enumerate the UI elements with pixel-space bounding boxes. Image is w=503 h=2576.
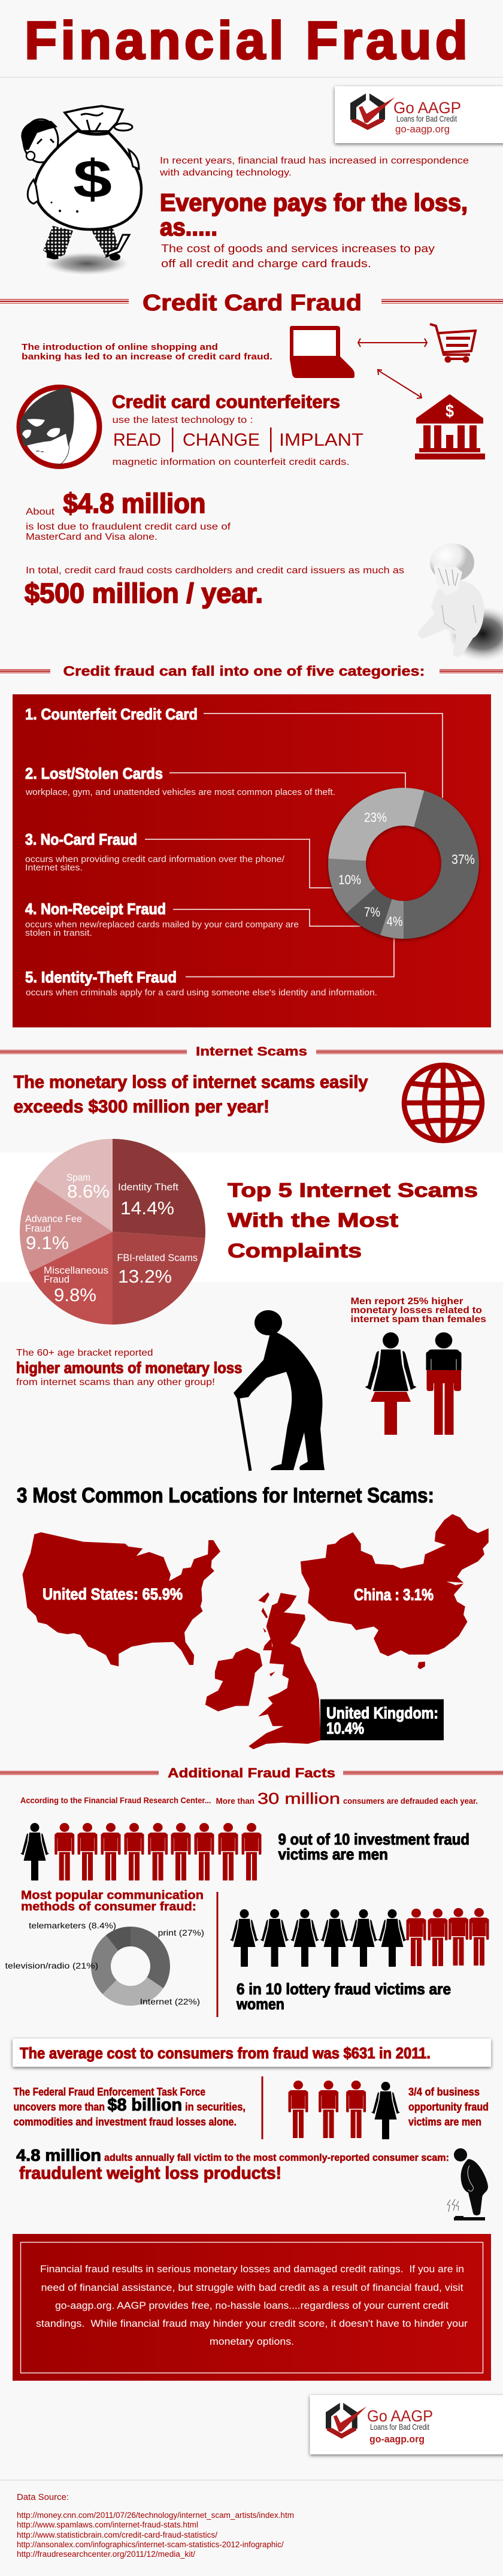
- chart: internet scam pie: Fraud: [44, 1274, 69, 1285]
- text: weight loss scam: 4.8 million: [16, 2146, 101, 2164]
- headline: 300 million: [13, 1072, 368, 1117]
- icon: figure on scale: [447, 2148, 488, 2220]
- stat: 500 million: $500 million / year.: [25, 578, 263, 609]
- map: united states: United States: 65.9%: [43, 1585, 183, 1603]
- intro text 2: off all credit and charge card frauds.: [161, 258, 371, 270]
- text: online shopping: banking has led to an increase of credit card fraud.: [22, 352, 272, 362]
- data sources: http://money.cnn.com/2011/07/26/technology/internet_scam_artists/index.htm: [17, 2511, 294, 2520]
- heading: credit card fraud: Credit Card Fraud: [143, 291, 362, 316]
- panel: conclusion: standings. While financial fraud may hinder your credit score, it doesn't have to hinder your: [36, 2318, 468, 2329]
- text: men report: internet spam than females: [351, 1314, 486, 1325]
- text: online shopping: [22, 343, 272, 362]
- title: Financial Fraud: [25, 10, 468, 70]
- panel: conclusion: go-aagp.org. AAGP provides free, no-hassle loans....regardless of your current credit: [55, 2300, 449, 2311]
- text: 30 million consumers: More than: [216, 1797, 254, 1806]
- data sources: [17, 2492, 294, 2559]
- category 5: 5. Identity-Theft Fraud: [25, 968, 177, 986]
- text: weight loss scam: fraudulent weight loss products!: [19, 2164, 281, 2183]
- logo card top: [335, 86, 503, 143]
- category 3: 3. No-Card Fraud: [25, 830, 137, 848]
- chart: communication methods donut: Internet (22%): [140, 1997, 200, 2006]
- chart: communication methods donut: telemarketers (8.4%): [29, 1921, 116, 1930]
- logo wordmark: Go AAGP: [393, 99, 461, 117]
- text: weight loss scam: adults annually fall victim to the most commonly-reported consumer scam:: [104, 2152, 449, 2163]
- data sources: Data Source:: [17, 2492, 69, 2502]
- heading: communication methods: [21, 1889, 204, 1913]
- text: 30 million consumers: 30 million: [257, 1789, 340, 1807]
- text: lottery victims: women: [236, 1995, 284, 2013]
- intro text: with advancing technology.: [159, 168, 292, 178]
- text: 30 million consumers: [20, 1789, 478, 1807]
- text: 30 million consumers: According to the Financial Fraud Research Center...: [20, 1796, 211, 1805]
- stat: 4.8 million: $4.8 million: [63, 488, 206, 519]
- text: 60+ age bracket: higher amounts of monetary loss: [16, 1359, 242, 1377]
- arrow: laptop to cart: [358, 338, 427, 347]
- panel: conclusion: monetary options.: [210, 2336, 294, 2347]
- text: task force: The Federal Fraud Enforcement Task Force: [13, 2086, 205, 2098]
- data sources: http://ansonalex.com/infographics/internet-scam-statistics-2012-infographic/: [17, 2540, 284, 2549]
- heading: internet scams: Internet Scams: [196, 1045, 307, 1059]
- heading: top 5 internet scams: [228, 1179, 478, 1262]
- headline: everyone pays: Everyone pays for the loss,: [160, 189, 468, 216]
- chart: internet scam pie: Advance Fee: [25, 1213, 82, 1224]
- text: lottery victims: [236, 1980, 451, 2013]
- text: business opportunity victims: victims are men: [408, 2116, 481, 2128]
- text: 60+ age bracket: [16, 1348, 242, 1387]
- chart: internet scam pie: 14.4%: [120, 1198, 174, 1219]
- heading: additional fraud facts: Additional Fraud Facts: [168, 1765, 335, 1780]
- chart: fraud category donut: 23%: [364, 810, 387, 825]
- category 5: [25, 968, 377, 998]
- chart: internet scam pie: Identity Theft: [118, 1181, 178, 1193]
- icon row: 3 of 4 business victims men: [289, 2081, 399, 2139]
- text: task force: $8 billion: [108, 2096, 182, 2115]
- category 1: 1. Counterfeit Credit Card: [25, 705, 198, 723]
- category 3: Internet sites.: [25, 863, 83, 873]
- category 4: stolen in transit.: [25, 929, 92, 938]
- headline: everyone pays: as.....: [160, 213, 217, 241]
- headline: everyone pays: [160, 189, 468, 241]
- illustration: stressed figure: [418, 543, 503, 661]
- category 4: occurs when new/replaced cards mailed by your card company are: [25, 920, 299, 930]
- chart: internet scam pie: Spam: [66, 1172, 90, 1183]
- category 4: 4. Non-Receipt Fraud: [25, 900, 166, 918]
- logo url: go-aagp.org: [395, 123, 450, 135]
- icon row: 9 of 10 investment victims men: [21, 1823, 261, 1880]
- text: men report: Men report 25% higher: [351, 1296, 463, 1307]
- map: united kingdom: 10.4%: [326, 1719, 364, 1737]
- logo tagline: Loans for Bad Credit: [396, 114, 457, 123]
- chart: fraud category donut: 4%: [387, 914, 402, 929]
- text: task force: uncovers more than: [13, 2101, 105, 2113]
- text: business opportunity victims: opportunity fraud: [408, 2101, 489, 2113]
- stat: 500 million: In total, credit card fraud costs cardholders and credit card issuers as much as: [26, 566, 404, 576]
- text: investment fraud victims: 9 out of 10 investment fraud: [278, 1830, 469, 1848]
- text: task force: in securities,: [185, 2101, 246, 2113]
- stat: 4.8 million: [26, 488, 231, 542]
- category 3: occurs when providing credit card information over the phone/: [25, 855, 285, 864]
- heading: top 5 internet scams: Top 5 Internet Scams: [228, 1179, 478, 1201]
- text: business opportunity victims: [408, 2086, 489, 2128]
- stat: 4.8 million: is lost due to fraudulent credit card use of: [26, 522, 231, 532]
- heading: top 5 internet scams: With the Most: [228, 1209, 398, 1231]
- heading: communication methods: methods of consumer fraud:: [21, 1900, 196, 1913]
- stat: 500 million: [25, 566, 404, 609]
- category 4: [25, 900, 299, 938]
- chart: internet scam pie: Fraud: [25, 1223, 51, 1234]
- text: task force: [13, 2086, 246, 2128]
- chart: internet scam pie: 9.8%: [54, 1284, 96, 1305]
- panel: conclusion: need of financial assistance, but struggle with bad credit as a result of financial fraud, visit: [41, 2282, 463, 2293]
- chart: communication methods donut: television/radio (21%): [5, 1961, 98, 1970]
- map: united kingdom: [205, 1592, 444, 1749]
- chart: fraud category donut: 7%: [364, 905, 380, 920]
- text: counterfeiters: CHANGE: [183, 430, 260, 450]
- text: investment fraud victims: victims are men: [278, 1845, 388, 1863]
- icon: bank: $: [446, 401, 454, 421]
- text: investment fraud victims: [278, 1830, 469, 1863]
- data sources: http://fraudresearchcenter.org/2011/12/media_kit/: [17, 2550, 195, 2559]
- category 2: [25, 764, 335, 797]
- text: task force: commodities and investment fraud losses alone.: [13, 2116, 237, 2128]
- text: men report: [351, 1296, 486, 1325]
- chart: internet scam pie: 8.6%: [67, 1181, 110, 1202]
- icon: logo mark: [350, 93, 395, 130]
- map: china: [301, 1514, 489, 1669]
- icon row: 6 of 10 lottery victims women: [231, 1908, 489, 1967]
- map: united kingdom: United Kingdom:: [326, 1704, 438, 1722]
- chart: internet scam pie: [20, 1139, 205, 1325]
- logo url: go-aagp.org: [369, 2433, 425, 2445]
- text: weight loss scam: [16, 2146, 449, 2183]
- icon: woman and man share: [366, 1332, 467, 1437]
- chart: fraud category donut: [328, 788, 479, 939]
- icon: laptop: [290, 326, 354, 378]
- text: business opportunity victims: 3/4 of business: [408, 2086, 480, 2098]
- logo tagline: Loans for Bad Credit: [370, 2422, 429, 2432]
- text: counterfeiters: READ: [113, 430, 161, 450]
- data sources: http://www.spamlaws.com/internet-fraud-stats.html: [17, 2520, 198, 2529]
- headline: 300 million: The monetary loss of internet scams easily: [13, 1072, 368, 1092]
- data sources: http://www.statisticbrain.com/credit-card-fraud-statistics/: [17, 2530, 217, 2539]
- intro text: [159, 156, 469, 178]
- callout: average cost: [13, 2039, 491, 2067]
- icon: masked thief: [19, 387, 99, 467]
- heading: communication methods: Most popular communication: [21, 1889, 204, 1902]
- chart: communication methods donut: [5, 1921, 204, 2006]
- heading: five categories: Credit fraud can fall into one of five categories:: [63, 663, 425, 679]
- text: counterfeiters: use the latest technology to :: [113, 415, 253, 425]
- intro text 2: The cost of goods and services increases to pay: [161, 243, 435, 255]
- callout: average cost: The average cost to consumers from fraud was $631 in 2011.: [20, 2044, 431, 2062]
- text: counterfeiters: magnetic information on counterfeit credit cards.: [113, 457, 350, 467]
- text: 60+ age bracket: The 60+ age bracket reported: [16, 1348, 153, 1358]
- icon: cart: [430, 324, 475, 363]
- chart: internet scam pie: Miscellaneous: [44, 1265, 108, 1276]
- icon: elderly person with cane: [234, 1310, 325, 1471]
- chart: internet scam pie: 9.1%: [26, 1232, 69, 1253]
- chart: fraud category donut: 10%: [338, 872, 361, 887]
- chart: internet scam pie: 13.2%: [118, 1266, 172, 1287]
- heading: top 5 internet scams: Complaints: [228, 1239, 362, 1262]
- text: men report: monetary losses related to: [351, 1305, 482, 1316]
- logo wordmark: Go AAGP: [367, 2407, 433, 2425]
- illustration: man carrying money bag: [21, 106, 141, 275]
- panel: five categories: [13, 694, 491, 1027]
- panel: conclusion: [13, 2234, 491, 2381]
- text: counterfeiters: Credit card counterfeiters: [112, 391, 340, 412]
- panel: conclusion: Financial fraud results in serious monetary losses and damaged credit ratings. If you are in: [40, 2264, 464, 2275]
- category 5: occurs when criminals apply for a card using someone else's identity and information.: [26, 988, 377, 998]
- stat: 4.8 million: MasterCard and Visa alone.: [26, 532, 157, 542]
- icon: globe: [404, 1065, 482, 1141]
- text: 60+ age bracket: from internet scams than any other group!: [16, 1377, 215, 1387]
- intro text 2: [161, 243, 435, 270]
- icon: logo mark: [326, 2403, 366, 2439]
- stat: 4.8 million: About: [26, 507, 55, 517]
- headline: 300 million: exceeds $300 million per year!: [13, 1097, 269, 1117]
- icon: bank: [415, 394, 485, 459]
- category 2: 2. Lost/Stolen Cards: [25, 764, 163, 782]
- logo card bottom: [310, 2395, 503, 2454]
- text: counterfeiters: [112, 391, 363, 467]
- chart: fraud category donut: 37%: [452, 852, 475, 867]
- chart: internet scam pie: FBI-related Scams: [117, 1252, 198, 1263]
- text: counterfeiters: IMPLANT: [279, 430, 363, 450]
- arrow: laptop to bank: [378, 370, 422, 398]
- category 3: [25, 830, 285, 873]
- chart: communication methods donut: print (27%): [158, 1928, 204, 1937]
- map: china: China : 3.1%: [354, 1586, 434, 1604]
- text: online shopping: The introduction of online shopping and: [22, 343, 218, 352]
- map: united states: [22, 1532, 220, 1667]
- text: 30 million consumers: consumers are defrauded each year.: [343, 1797, 478, 1806]
- text: lottery victims: 6 in 10 lottery fraud victims are: [237, 1980, 451, 1998]
- illustration: man carrying money bag: $: [73, 150, 112, 210]
- intro text: In recent years, financial fraud has increased in correspondence: [160, 156, 469, 166]
- category 2: workplace, gym, and unattended vehicles are most common places of theft.: [25, 788, 335, 797]
- heading: common locations: 3 Most Common Locations for Internet Scams:: [17, 1484, 434, 1507]
